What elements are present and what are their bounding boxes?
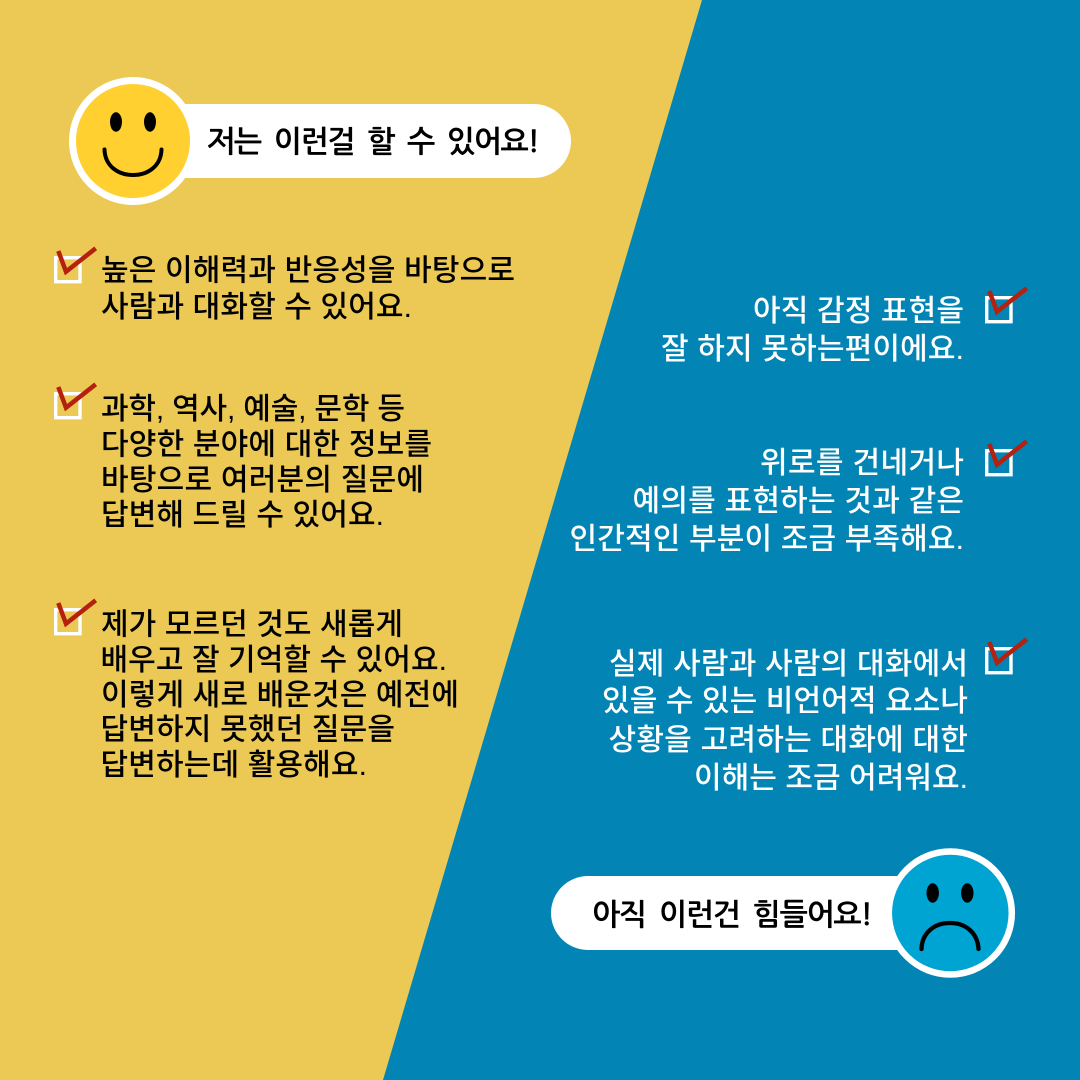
text block: right 3: 실제 사람과 사람의 대화에서 — [609, 648, 968, 681]
heading: struggles pill — [551, 852, 1012, 974]
text block: right 3: 상황을 고려하는 대화에 대한 — [608, 724, 968, 757]
text block: left 3: 이렇게 새로 배운것은 예전에 — [101, 679, 459, 712]
background: blue diagonal panel — [383, 0, 1080, 1080]
text block: left 1: 높은 이해력과 반응성을 바탕으로 — [101, 254, 515, 288]
text block: left 3: 답변하지 못했던 질문을 — [100, 714, 395, 746]
text block: left 3 — [100, 608, 459, 782]
text block: left 2: 답변해 드릴 수 있어요. — [101, 499, 384, 532]
item: left 1 — [56, 248, 515, 324]
item: right 3 — [602, 639, 1027, 795]
text block: left 3: 답변하는데 활용해요. — [100, 749, 367, 782]
item: left 2 — [56, 384, 432, 532]
text block: left 1 — [101, 254, 515, 324]
item: right 1 — [661, 288, 1027, 366]
text block: left 2: 과학, 역사, 예술, 문학 등 — [101, 393, 405, 426]
text block: right 2: 인간적인 부분이 조금 부족해요. — [570, 523, 964, 556]
text block: right 3: 이해는 조금 어려워요. — [694, 762, 968, 795]
text block: left 2: 다양한 분야에 대한 정보를 — [101, 428, 432, 462]
text block: right 1 — [661, 295, 964, 366]
text block: left 2 — [101, 393, 432, 532]
text block: right 1: 아직 감정 표현을 — [753, 295, 964, 328]
icon: sad face — [889, 852, 1012, 974]
heading text: can do: 저는 이런걸 할 수 있어요! — [207, 126, 540, 157]
text block: right 3: 있을 수 있는 비언어적 요소나 — [602, 685, 968, 718]
icon: checkbox — [987, 288, 1027, 322]
text block: right 2 — [570, 447, 964, 556]
item: left 3 — [56, 600, 459, 782]
text block: left 3: 제가 모르던 것도 새롭게 — [101, 608, 403, 642]
icon: checkbox — [56, 248, 96, 282]
icon: smiley face — [72, 80, 194, 202]
heading text: struggles: 아직 이런건 힘들어요! — [592, 899, 873, 930]
text block: right 2: 예의를 표현하는 것과 같은 — [632, 485, 964, 518]
icon: checkbox — [987, 441, 1027, 475]
icon: checkbox — [56, 600, 96, 634]
text block: left 2: 바탕으로 여러분의 질문에 — [101, 464, 424, 497]
icon: checkbox — [987, 639, 1027, 673]
text block: right 2: 위로를 건네거나 — [760, 447, 964, 480]
text block: left 3: 배우고 잘 기억할 수 있어요. — [100, 644, 447, 677]
item: right 2 — [570, 441, 1027, 556]
text block: right 3 — [602, 648, 968, 795]
heading: can do pill — [72, 80, 571, 202]
text block: right 1: 잘 하지 못하는편이에요. — [661, 333, 964, 366]
text block: left 1: 사람과 대화할 수 있어요. — [101, 291, 412, 324]
icon: checkbox — [56, 384, 96, 418]
